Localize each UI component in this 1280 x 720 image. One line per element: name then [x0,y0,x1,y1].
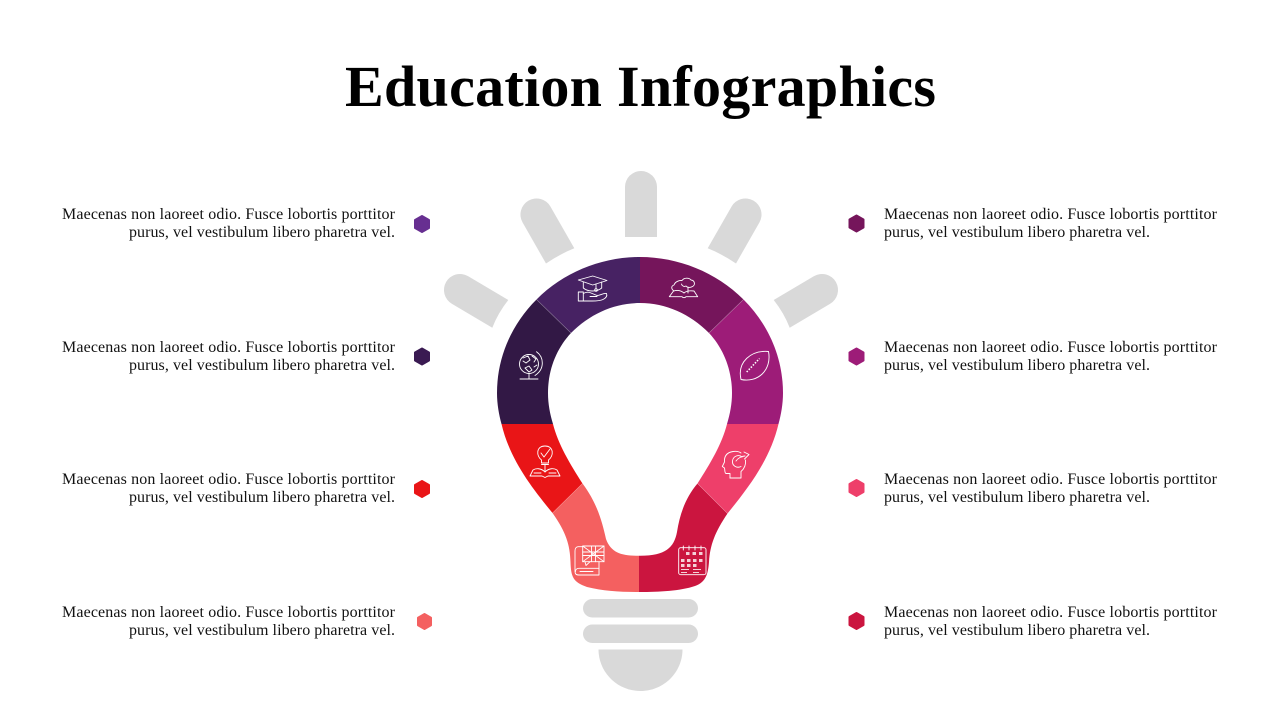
left text block 1: Maecenas non laoreet odio. Fusce lobortis porttitor [62,206,396,223]
ray: upper right [708,198,762,264]
ray: upper left [520,198,574,264]
hexagon marker: right 2 [850,348,864,364]
right text block 1 [884,206,1218,241]
segment: coral [552,484,639,592]
icon: football [740,351,769,380]
left text block 3 [62,471,396,506]
left text block 4 [62,604,396,639]
segment: pink [698,424,778,514]
right text block 4: Maecenas non laoreet odio. Fusce lobortis porttitor [884,604,1218,621]
right text block 2 [884,339,1218,374]
hexagon marker: left 4 [418,614,431,629]
right text block 1: purus, vel vestibulum libero pharetra vel. [884,224,1150,241]
left text block 1 [62,206,396,241]
left text block 2 [62,339,396,374]
right text block 2: Maecenas non laoreet odio. Fusce lobortis porttitor [884,339,1218,356]
base bar 1 [583,599,698,618]
right text block 2: purus, vel vestibulum libero pharetra vel. [884,357,1150,374]
right text block 3 [884,471,1218,506]
icon: globe [520,352,542,379]
base cap [598,650,682,691]
hexagon marker: right 1 [850,216,864,232]
icon: calendar [679,546,706,575]
ray: far left [444,274,508,328]
right text block 3: Maecenas non laoreet odio. Fusce lobortis porttitor [884,471,1218,488]
icon: book with tree [669,278,698,298]
segment: magenta [709,300,783,424]
base bar 2 [583,624,698,643]
right text block 1: Maecenas non laoreet odio. Fusce lobortis porttitor [884,206,1218,223]
left text block 3: Maecenas non laoreet odio. Fusce lobortis porttitor [62,471,396,488]
light rays [444,171,838,328]
ray: top [625,171,657,237]
left text block 1: purus, vel vestibulum libero pharetra vel. [129,224,395,241]
left text block 4: Maecenas non laoreet odio. Fusce lobortis porttitor [62,604,396,621]
left text block 4: purus, vel vestibulum libero pharetra vel. [129,622,395,639]
hexagon marker: left 1 [415,216,429,232]
title: Education Infographics [345,54,936,119]
segment: plum [640,257,744,333]
hexagon marker: right 4 [850,613,864,629]
hexagon marker: left 2 [415,348,429,364]
icon: head with target arrow [722,451,749,478]
bulb segments [497,257,783,592]
right text block 4: purus, vel vestibulum libero pharetra vel. [884,622,1150,639]
icon: book with flag [575,546,604,575]
segment: crimson [639,484,728,592]
hexagon marker: right 3 [850,480,864,496]
hexagon marker: left 3 [415,481,429,497]
left text block 2: purus, vel vestibulum libero pharetra vel. [129,357,395,374]
left text block 3: purus, vel vestibulum libero pharetra vel. [129,489,395,506]
segment: red [502,424,582,513]
segment: graduation purple [536,257,640,333]
right text block 3: purus, vel vestibulum libero pharetra vel. [884,489,1150,506]
bulb base [583,599,698,691]
right text block 4 [884,604,1218,639]
icon: graduation cap on hand [578,276,607,301]
icon: light bulb on book [530,446,560,478]
segment: dark globe [497,300,571,424]
ray: far right [774,274,838,328]
left text block 2: Maecenas non laoreet odio. Fusce lobortis porttitor [62,339,396,356]
